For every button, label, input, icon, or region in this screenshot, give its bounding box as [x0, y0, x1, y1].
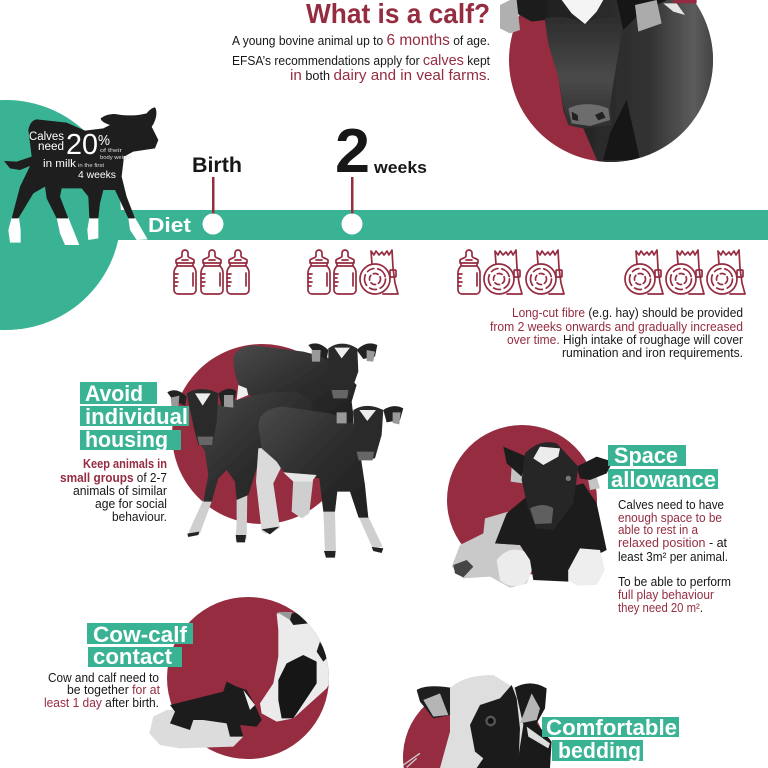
back calf: [233, 343, 377, 422]
text: small groups: [60, 457, 167, 524]
roughage text: from 2 weeks onwards and gradually increased: [490, 320, 743, 334]
icons: later diet: [458, 250, 564, 294]
face: [440, 675, 523, 768]
photo: lying calf in red circle: [447, 425, 613, 588]
icons: birth diet: [174, 250, 249, 294]
fact text: need: [38, 141, 64, 153]
silhouette: [4, 107, 158, 245]
heading: comfortable bedding: [542, 715, 679, 763]
heading: space allowance: allowance: [611, 467, 716, 492]
two weeks heading: [335, 117, 427, 186]
diet label: Diet: [148, 215, 191, 237]
text: space allowance: they need 20 m².: [618, 601, 703, 615]
head: [522, 442, 578, 530]
intro text: A young bovine animal up to 6 months of age.: [232, 32, 490, 49]
left ear: [417, 686, 455, 718]
text: space allowance: least 3m² per animal.: [618, 550, 728, 564]
fact text: [29, 129, 131, 181]
fact text: in the first: [78, 163, 105, 169]
heading: avoid individual housing: housing: [85, 427, 168, 452]
fact text: %: [98, 132, 110, 149]
heading: cow-calf contact: [87, 622, 193, 669]
two weeks heading: weeks: [373, 158, 427, 177]
roughage text: rumination and iron requirements.: [562, 346, 743, 360]
roughage text: Long-cut fibre (e.g. hay) should be provided: [512, 306, 743, 320]
ears and tags: [500, 0, 697, 33]
text: space allowance: full play behaviour: [618, 588, 714, 602]
text: cow-calf contact: Cow and calf need to: [48, 671, 159, 685]
fact text: in milk: [43, 158, 77, 170]
intro text: in both dairy and in veal farms.: [290, 67, 490, 84]
text: space allowance: relaxed position - at: [618, 536, 728, 550]
lying calf: [149, 682, 262, 748]
heading: cow-calf contact: contact: [93, 644, 173, 669]
photo: cow and calf in red circle: [149, 597, 333, 759]
white foreleg: [568, 548, 605, 586]
calf body and head: [545, 0, 720, 163]
fact text: Calves: [29, 131, 64, 143]
heading: comfortable bedding: Comfortable: [546, 715, 677, 740]
icons: roughage diet: [625, 250, 745, 294]
text: space allowance: [618, 498, 731, 615]
text: small groups: behaviour.: [112, 510, 167, 524]
calf silhouette with milk fact: [4, 107, 158, 245]
heading: comfortable bedding: bedding: [558, 738, 641, 763]
heading: space allowance: Space: [614, 443, 678, 468]
horn tip: [277, 612, 292, 620]
diet timeline bar: [110, 177, 768, 240]
neck: [477, 683, 552, 768]
text: space allowance: able to rest in a: [618, 523, 698, 537]
roughage text: [490, 306, 743, 360]
fact text: of their: [100, 148, 122, 154]
photo: calf portrait in red circle: [500, 0, 720, 163]
fact text: 20: [66, 129, 98, 161]
cow head: [260, 612, 333, 722]
text: cow-calf contact: be together for at: [67, 683, 161, 697]
left calf: [167, 385, 313, 542]
two weeks heading: 2: [335, 117, 370, 186]
text: cow-calf contact: least 1 day after birth.: [44, 696, 159, 710]
text: space allowance: To be able to perform: [618, 575, 731, 589]
white rear: [452, 512, 533, 588]
birth marker: [202, 177, 224, 234]
text: space allowance: enough space to be: [618, 511, 722, 525]
black body: [495, 483, 607, 582]
text: small groups: age for social: [95, 497, 167, 511]
green semicircle: [0, 100, 121, 330]
right calf: [256, 406, 403, 558]
heading: avoid individual housing: [80, 381, 189, 452]
intro text: EFSA’s recommendations apply for calves kept: [232, 52, 490, 69]
photo: group of calves in red circle: [167, 343, 403, 558]
ears and tags: [511, 465, 600, 490]
text: small groups: small groups of 2-7: [60, 471, 167, 485]
heading: cow-calf contact: Cow-calf: [93, 622, 188, 647]
right tag: [520, 693, 540, 723]
photo: calf face in red circle: [403, 675, 552, 768]
roughage text: over time. High intake of roughage will cover: [507, 333, 743, 347]
heading: space allowance: [608, 443, 718, 492]
straw: [403, 753, 420, 767]
icons: two weeks diet: [308, 250, 398, 294]
text: cow-calf contact: [44, 671, 161, 710]
two weeks marker: [342, 177, 362, 234]
intro text: [232, 32, 490, 84]
birth heading: Birth: [192, 154, 242, 177]
text: small groups: Keep animals in: [83, 457, 167, 471]
heading: avoid individual housing: Avoid: [85, 381, 143, 406]
heading: avoid individual housing: individual: [85, 404, 188, 429]
fact text: 4 weeks: [78, 169, 116, 181]
text: space allowance: Calves need to have: [618, 498, 724, 512]
fact text: body weight: [100, 155, 131, 161]
text: small groups: animals of similar: [73, 484, 167, 498]
